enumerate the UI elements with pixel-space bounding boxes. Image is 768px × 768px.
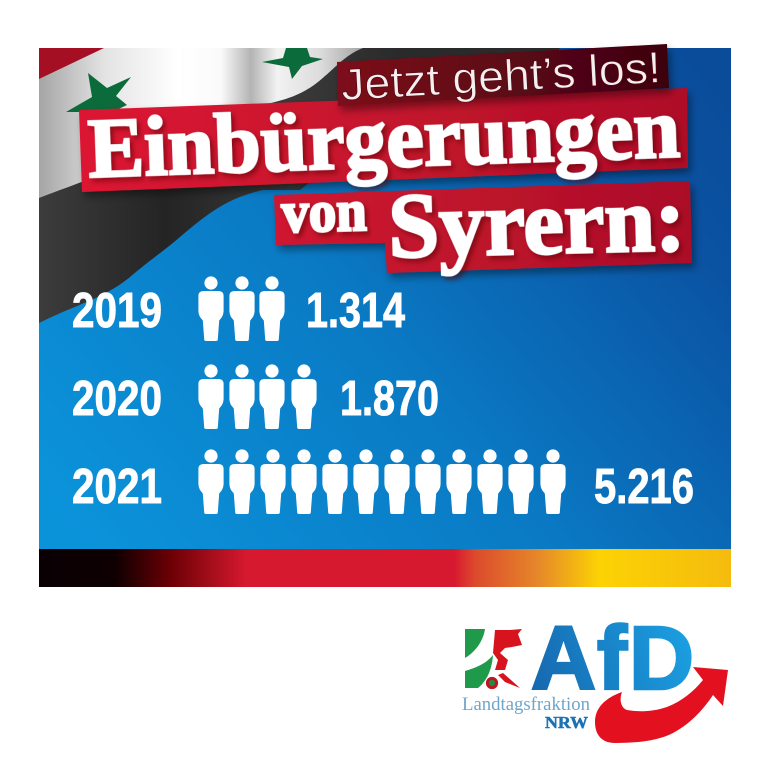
logo: NRW crest (465, 629, 522, 688)
logo: red arrow (595, 667, 728, 743)
logo: NRW: NRW (545, 713, 588, 732)
label: von Syrern (274, 167, 692, 277)
flag: red band (39, 48, 104, 79)
row: 2021 (72, 449, 694, 514)
row: 2021: 2021 (72, 460, 162, 514)
row: 2020 (72, 364, 439, 429)
panel: background (39, 48, 731, 549)
row: 2019: 1.314 (306, 284, 405, 338)
logo: AfD letters: AfD (531, 609, 694, 709)
logo: AfD NRW (462, 609, 728, 743)
label: von Syrern: von (281, 178, 367, 245)
row: 2020: 1.870 (340, 372, 439, 426)
label: Einbürgerungen: Einbürgerungen (86, 81, 681, 196)
flag: right star (262, 48, 323, 79)
row: 2021: 5.216 (594, 460, 694, 514)
bottom colour bar (39, 549, 731, 587)
flag: left star (66, 73, 131, 135)
row: 2020: 2020 (72, 372, 162, 426)
row: 2019 (72, 276, 405, 341)
logo: Landtagsfraktion: Landtagsfraktion (462, 694, 590, 715)
flag: white band (39, 48, 363, 198)
label: von Syrern: Syrern: (387, 167, 686, 277)
flag: black band (39, 48, 560, 323)
label: Jetzt geht's los: Jetzt geht’s los! (340, 43, 662, 110)
row: 2019: 2019 (72, 284, 162, 338)
